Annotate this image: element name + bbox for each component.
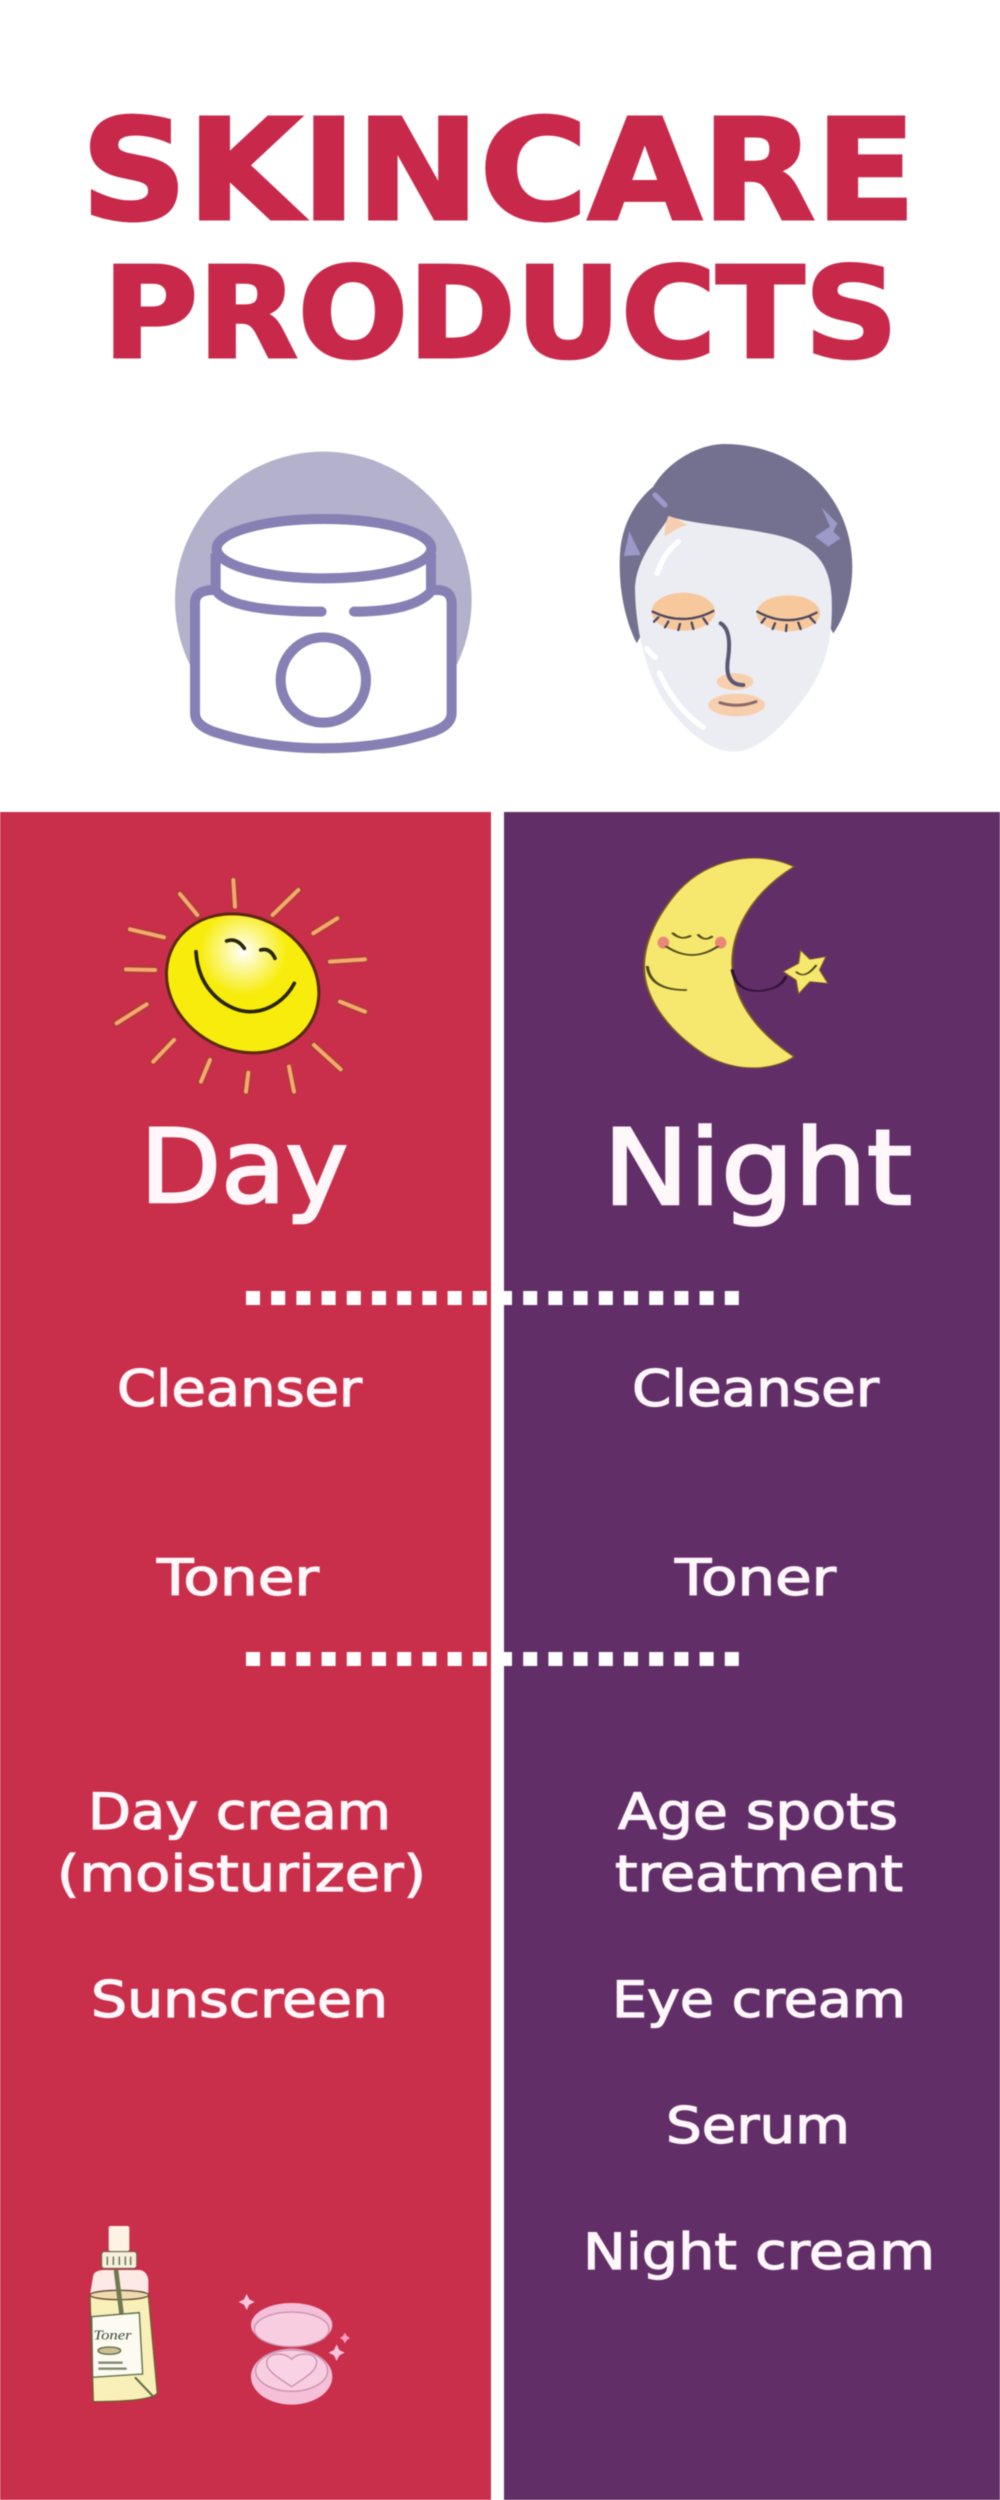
icon: compact powder bbox=[239, 2294, 350, 2405]
text block: day products bbox=[57, 1360, 426, 2029]
title: PRODUCTS bbox=[103, 240, 898, 387]
icon: toner bottle bbox=[90, 2226, 157, 2402]
text block: day products: Sunscreen bbox=[91, 1971, 388, 2029]
text block: night products: Serum bbox=[666, 2097, 850, 2155]
text block: day products: Day cream bbox=[88, 1783, 391, 1841]
panel: night bbox=[504, 812, 1000, 2500]
icon: face with sheet mask bbox=[620, 444, 852, 752]
divider: bottom dotted line bbox=[246, 1652, 739, 1666]
text block: day products: Cleanser bbox=[117, 1360, 362, 1418]
text block: night products: Cleanser bbox=[632, 1360, 879, 1418]
text block: night products: Night cream bbox=[583, 2223, 935, 2281]
text block: night products: Age spots bbox=[618, 1783, 898, 1841]
icon: sun bbox=[117, 880, 365, 1092]
icon: cream jar bbox=[175, 452, 472, 748]
text block: day products: Toner bbox=[156, 1549, 320, 1607]
text block: night products: Eye cream bbox=[612, 1971, 906, 2029]
text block: night products: Toner bbox=[674, 1549, 837, 1607]
text block: day products: (moisturizer) bbox=[57, 1845, 426, 1903]
icon: moon with star bbox=[644, 858, 828, 1068]
heading: night: Night bbox=[603, 1107, 912, 1229]
title bbox=[81, 90, 916, 387]
divider: top dotted line bbox=[246, 1291, 739, 1305]
heading: day: Day bbox=[140, 1108, 348, 1227]
icon: toner bottle: Toner bbox=[93, 2327, 133, 2342]
title: SKINCARE bbox=[81, 90, 916, 253]
panel: day bbox=[0, 812, 491, 2500]
text block: night products: treatment bbox=[615, 1845, 903, 1903]
text block: night products bbox=[583, 1360, 935, 2281]
